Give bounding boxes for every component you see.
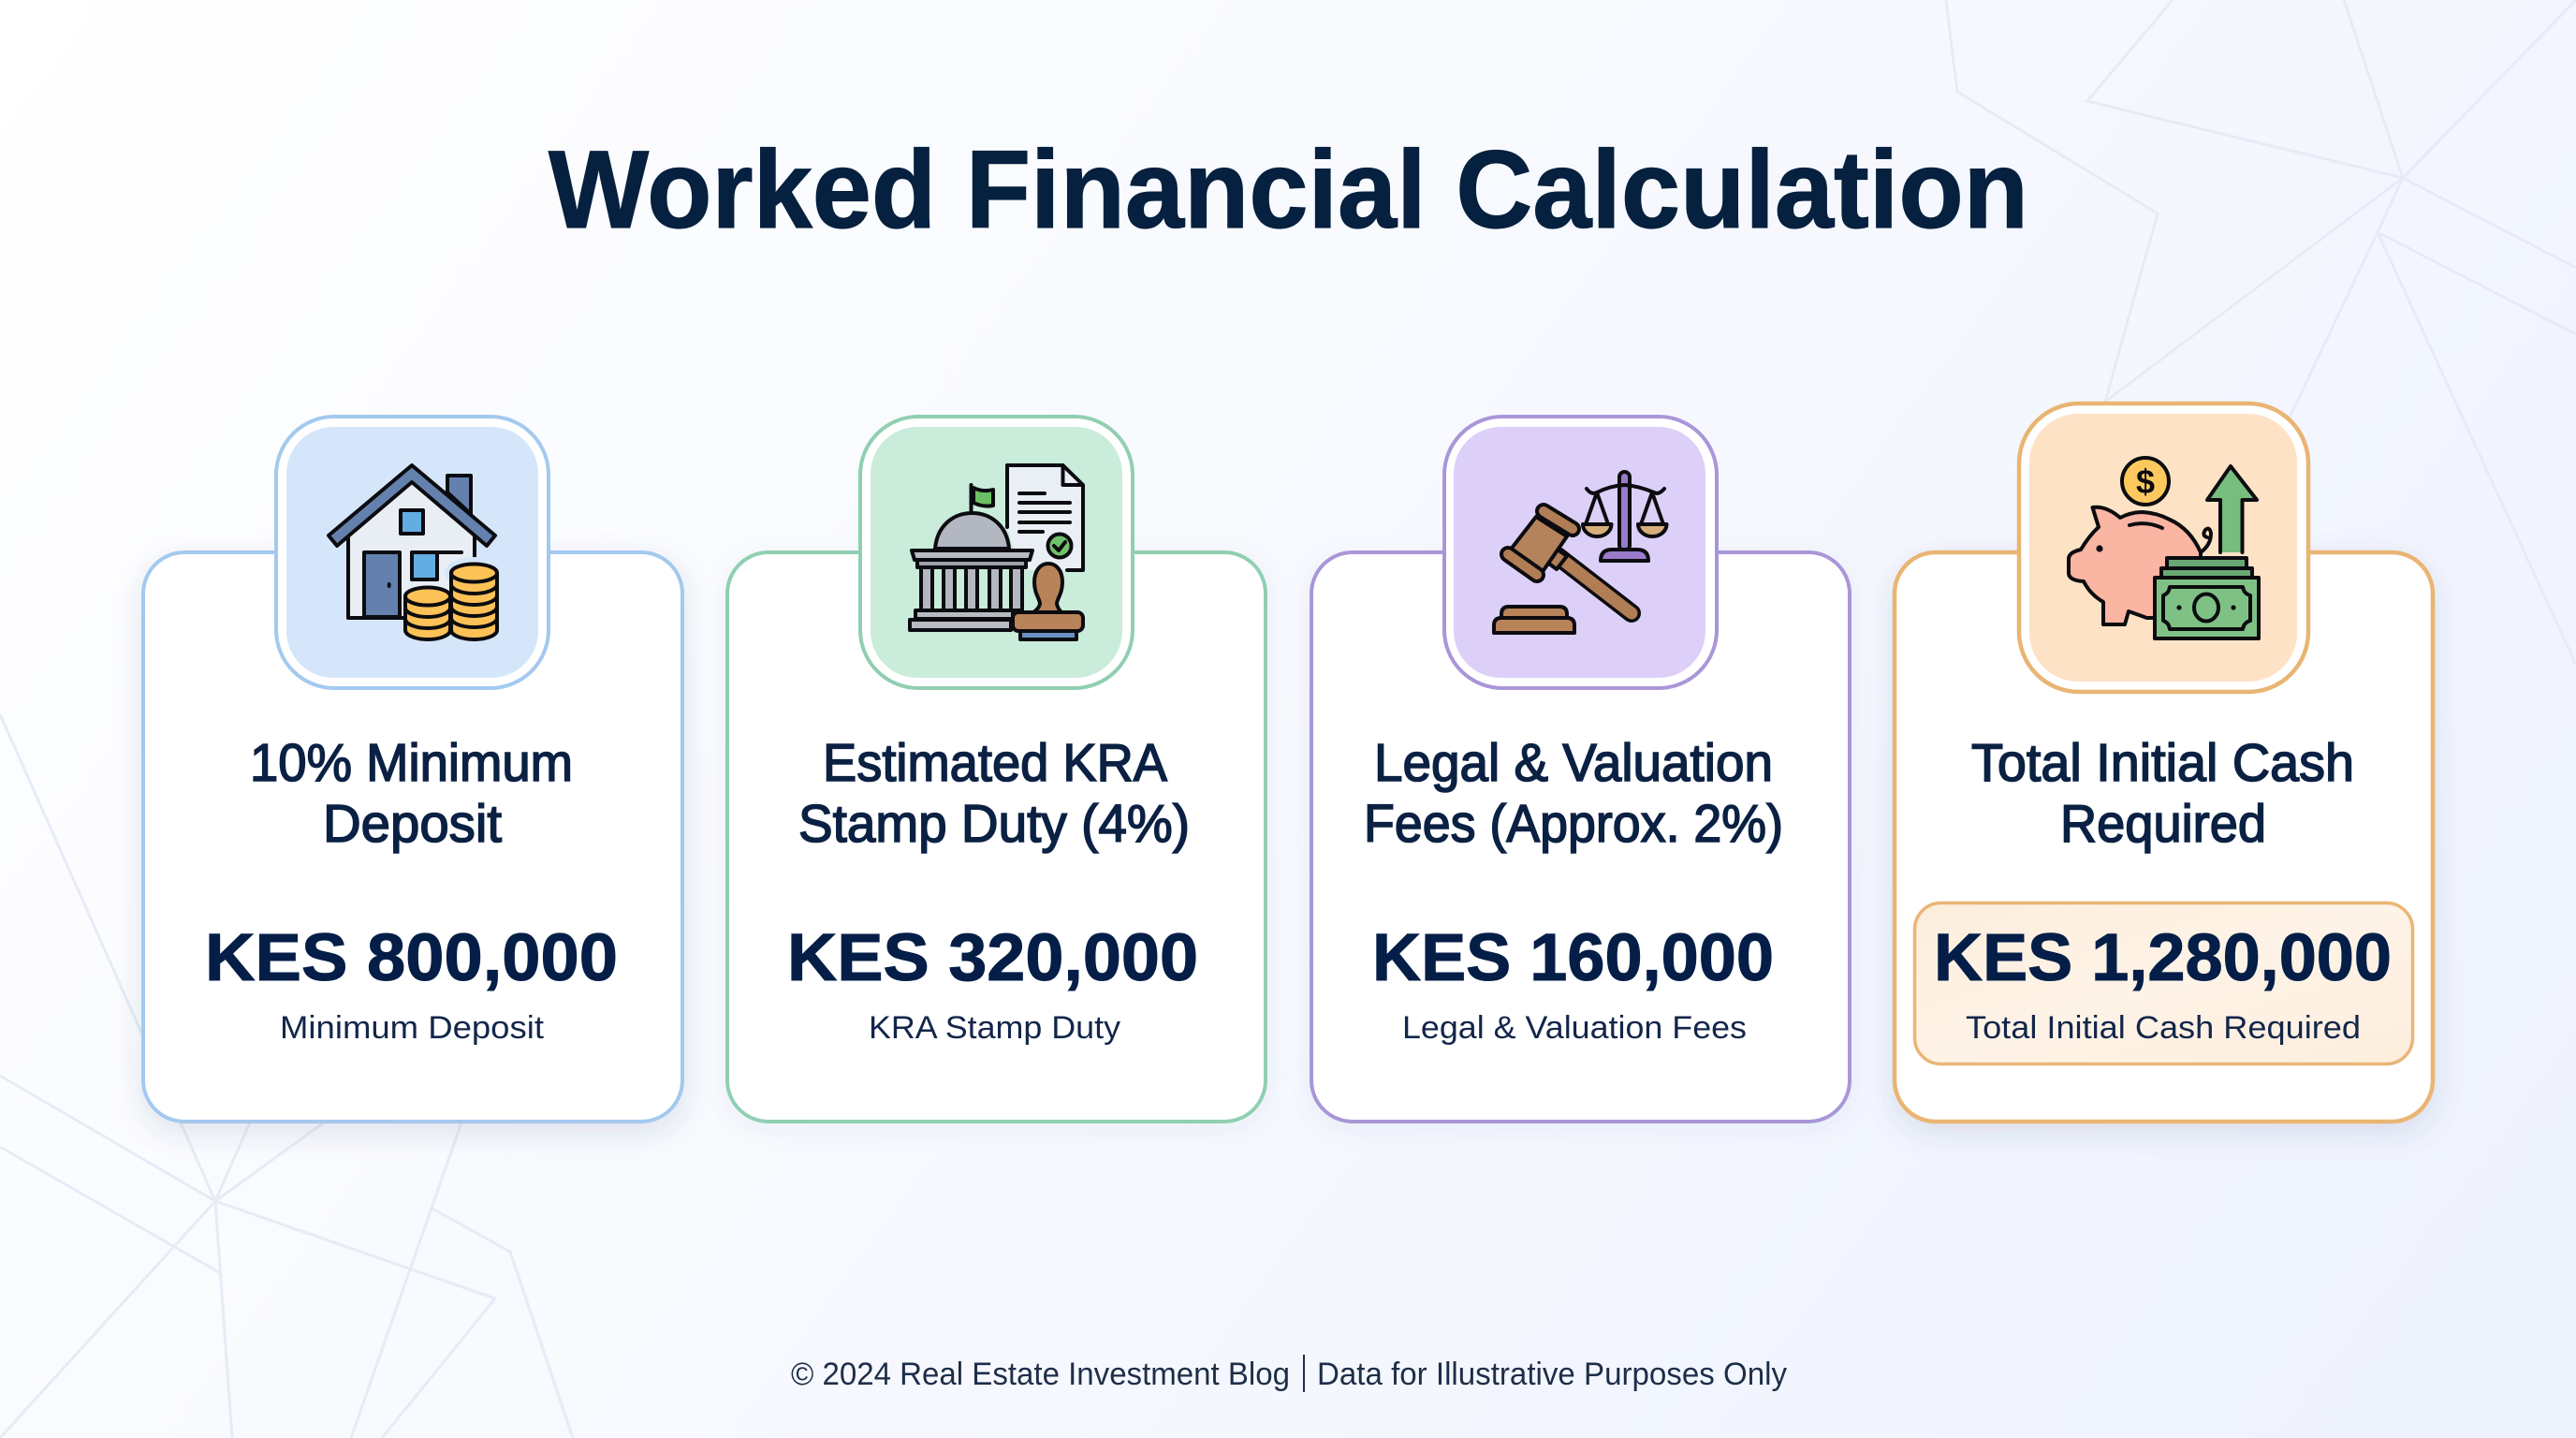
amount label: Minimum Deposit xyxy=(280,1010,545,1046)
card heading xyxy=(250,733,573,854)
card heading xyxy=(1971,733,2354,854)
card heading: Legal & Valuation xyxy=(1374,733,1773,793)
icon badge: gavel and scales xyxy=(1444,417,1717,688)
card heading: Deposit xyxy=(323,794,502,854)
card body xyxy=(727,552,1266,1122)
card heading: Required xyxy=(2060,794,2266,854)
footer: Data for Illustrative Purposes Only xyxy=(1317,1357,1787,1392)
title: Worked Financial Calculation xyxy=(549,128,2028,252)
amount: KES 1,280,000 xyxy=(1934,921,2392,995)
piggy bank xyxy=(2069,507,2211,624)
growth arrow xyxy=(2207,466,2257,552)
amount label: Legal & Valuation Fees xyxy=(1402,1010,1747,1046)
card heading: Total Initial Cash xyxy=(1971,733,2354,793)
card heading xyxy=(798,733,1190,854)
icon badge: government building, document and stamp xyxy=(860,417,1133,688)
card heading: Stamp Duty (4%) xyxy=(798,794,1190,854)
icon badge: piggy bank with cash xyxy=(2019,404,2308,692)
card body xyxy=(1895,552,2433,1122)
panel: total initial cash card xyxy=(1895,404,2433,1122)
footer: © 2024 Real Estate Investment Blog xyxy=(791,1357,1290,1392)
amount label: Total Initial Cash Required xyxy=(1966,1010,2361,1046)
panel: minimum deposit card xyxy=(143,417,682,1122)
panel: stamp duty card xyxy=(727,417,1266,1122)
card body xyxy=(143,552,682,1122)
card heading xyxy=(1364,733,1783,854)
card heading: 10% Minimum xyxy=(250,733,573,793)
highlighted total xyxy=(1915,902,2413,1064)
card heading: Estimated KRA xyxy=(823,733,1167,793)
icon badge: house with coins xyxy=(276,417,549,688)
amount: KES 160,000 xyxy=(1372,921,1774,995)
card heading: Fees (Approx. 2%) xyxy=(1364,794,1783,854)
cash stack xyxy=(2155,558,2259,638)
amount: KES 320,000 xyxy=(787,921,1198,995)
card body xyxy=(1311,552,1850,1122)
panel: legal and valuation fees card xyxy=(1311,417,1850,1122)
amount label: KRA Stamp Duty xyxy=(869,1010,1120,1046)
coin: $ xyxy=(2136,462,2155,501)
coin xyxy=(2122,458,2169,505)
amount: KES 800,000 xyxy=(205,921,618,995)
footer xyxy=(791,1355,1787,1392)
